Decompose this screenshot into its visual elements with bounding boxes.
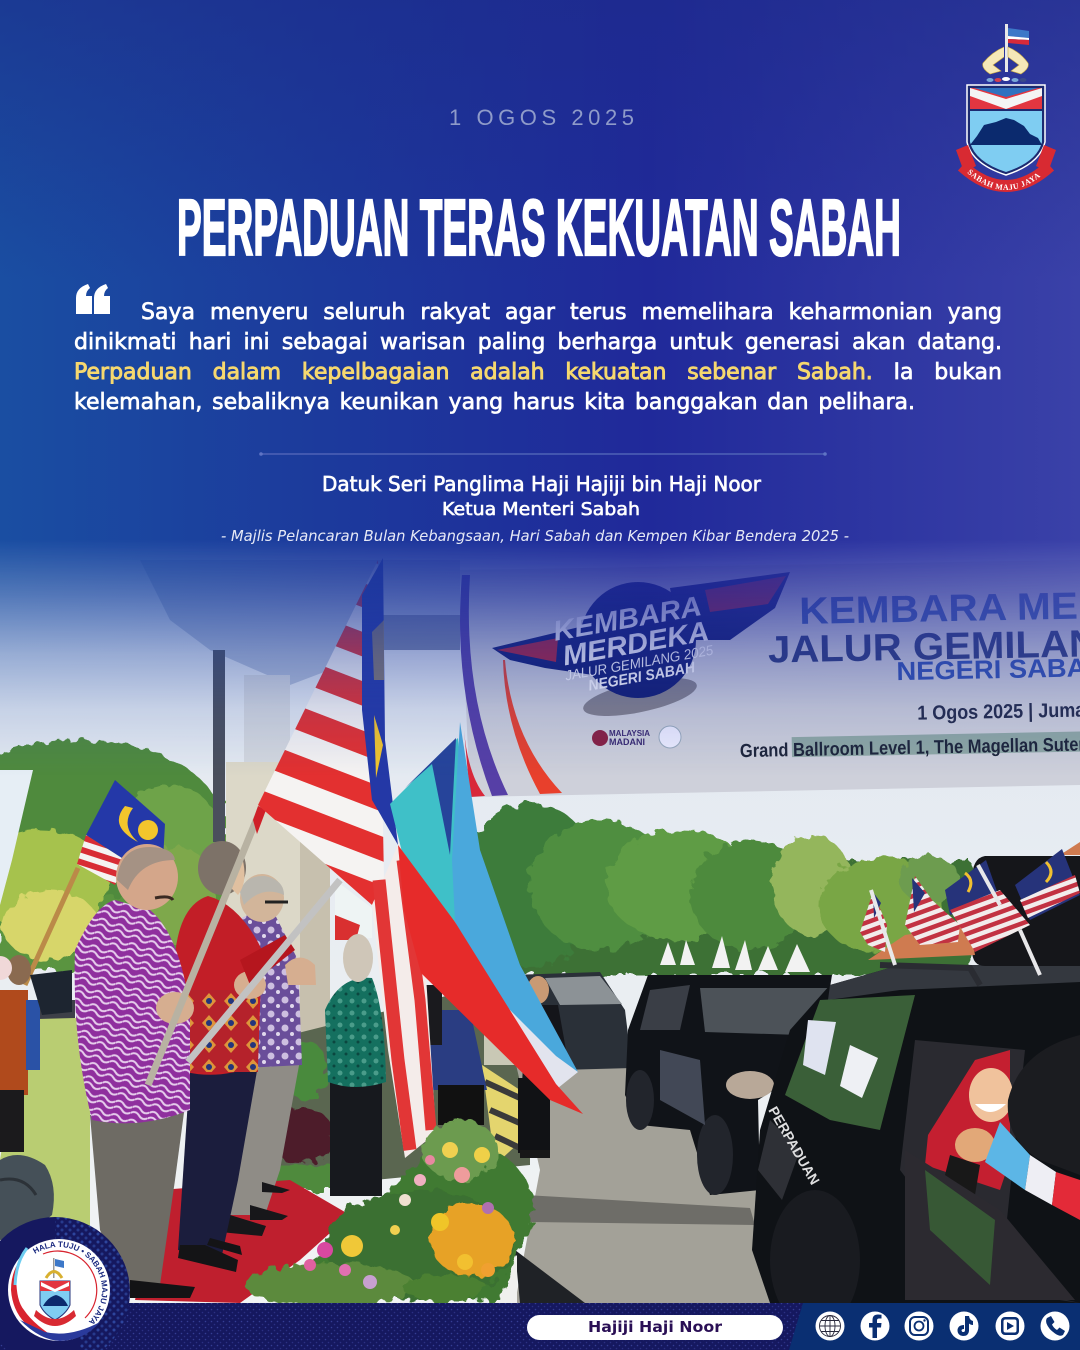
blue gradient background overlay [0,0,1080,800]
icon: facebook [860,1312,890,1340]
road [515,1060,780,1303]
date: 1 OGOS 2025 [449,105,634,130]
cylinder foreground left [0,1155,54,1240]
banner: KEMBARA MEI [799,585,1080,633]
quote text block: Perpaduan dalam kepelbagaian adalah kekuatan sebenar Sabah. Ia bukan [74,360,1002,385]
man four green shirt [325,934,386,1196]
quote text block: kelemahan, sebaliknya keunikan yang harus kita banggakan dan pelihara. [74,390,915,415]
man two red shirt [175,841,295,1272]
name pill: Hajiji Haji Noor [588,1318,723,1336]
badge: hala tuju sabah maju jaya: HALA TUJU • SABAH MAJU JAYA [32,1241,108,1324]
pickup car middle [625,975,832,1195]
trees behind left [0,740,225,970]
ribbon with motto: SABAH MAJU JAYA [968,170,1040,190]
icon: phone [1040,1312,1070,1340]
window lower reflection [905,1150,1075,1300]
icon: youtube play [996,1312,1024,1340]
small crest [34,1258,76,1326]
crest: sabah coat of arms [956,24,1056,192]
banner: MALAYSIA [609,729,650,738]
icon: tiktok [950,1312,978,1340]
banner: MADANI [609,737,645,747]
arms holding pole [983,47,1028,74]
kerb [482,1065,522,1165]
flower bed [245,1120,533,1307]
quote text block: dinikmati hari ini sebagai warisan paling berharga untuk generasi akan datang. [74,330,1002,355]
person left edge orange [0,955,40,1152]
flag: jalur gemilang [258,558,436,1158]
small flag background left [25,780,165,985]
car flags [860,849,1080,975]
people on the far side [422,976,566,1158]
icon: website globe [816,1312,844,1340]
big flag poles [148,806,340,1085]
canopy and pillar [140,560,460,1045]
badge: hala tuju sabah maju jaya [0,1217,130,1350]
icon: instagram [904,1312,934,1340]
divider [259,452,827,456]
red carpet [135,1180,350,1303]
house roof [868,925,975,960]
banner logo: MERDEKA [560,615,711,671]
photo: flag ceremony scene [0,540,1080,1330]
large pickup car [752,965,1080,1330]
banner logo [492,572,790,724]
ribbon with motto [956,145,1056,192]
banner: NEGERI SABA [896,652,1080,686]
woman in window [925,1050,1013,1195]
bottom bar [0,1303,1080,1350]
quote text block [74,300,1002,415]
sabah small flag back [335,880,372,940]
shield [967,85,1045,175]
banner logo: KEMBARA [551,590,704,647]
banner: JALUR GEMILAN [768,623,1080,672]
event name: - Majlis Pelancaran Bulan Kebangsaan, Hari Sabah dan Kempen Kibar Bendera 2025 - [221,527,849,545]
banner [460,560,1080,797]
flag: sabah [390,722,583,1114]
roof rack [880,965,980,985]
lawn [0,1018,90,1240]
speaker name: Datuk Seri Panglima Haji Hajiji bin Haji Noor [322,472,762,496]
banner logo: NEGERI SABAH [587,659,697,695]
far car [512,972,632,1070]
background behind the crowd [270,975,530,1190]
far left banner strip [0,770,33,905]
trees behind right [460,803,970,975]
large pickup car: PERPADUAN [765,1104,823,1187]
flag on pole [1005,24,1029,72]
man one purple shirt [75,844,195,1298]
beads [986,77,1026,82]
wing mirror [1008,1035,1080,1175]
quote text block: Saya menyeru seluruh rakyat agar terus memelihara keharmonian yang [141,300,1002,325]
small far flags [660,936,810,972]
name pill [527,1315,783,1340]
speaker title: Ketua Menteri Sabah [442,499,640,520]
shrubs behind people [266,1040,350,1190]
man three batik [220,874,316,1236]
window flag [985,1122,1030,1190]
icon: opening quotation mark [76,284,110,314]
distant car left [30,970,72,1015]
banner logo: JALUR GEMILANG 2025 [563,642,715,684]
roof box [972,856,1080,966]
